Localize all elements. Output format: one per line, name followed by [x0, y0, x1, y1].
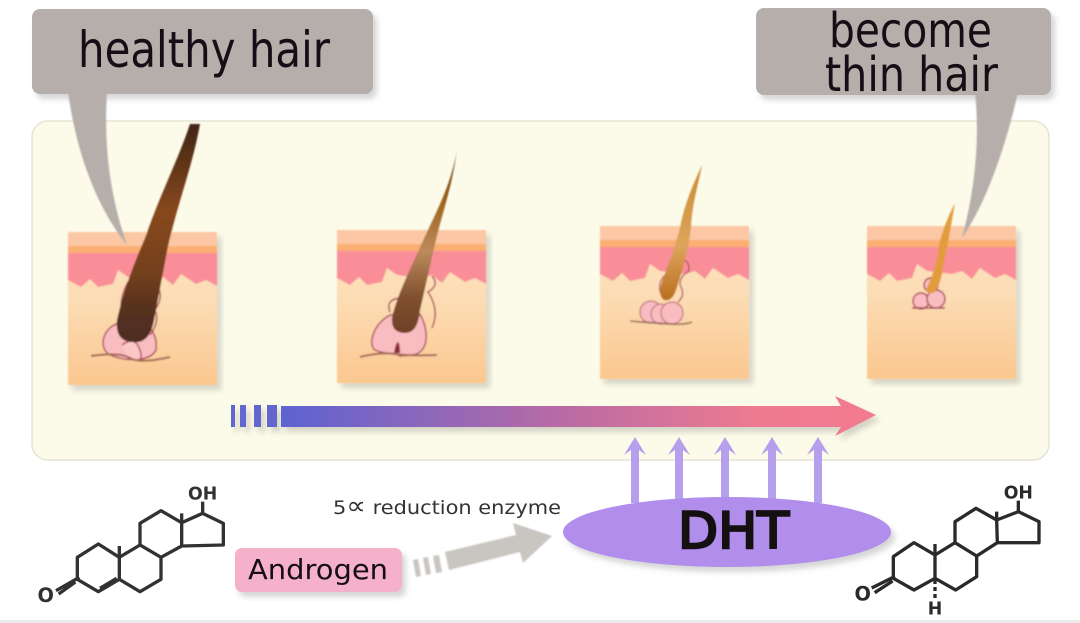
hair shaft [926, 203, 955, 293]
callout: healthy hair [32, 9, 373, 94]
papilla [103, 323, 156, 360]
DHT up arrows [624, 437, 829, 503]
sheath [121, 282, 160, 335]
stage 1: healthy follicle [68, 124, 217, 385]
progression arrow [231, 396, 876, 436]
label: become thin hair: thin hair [825, 47, 998, 103]
notch [394, 342, 400, 353]
hair shaft [660, 165, 702, 300]
label: healthy hair: healthy hair [78, 21, 330, 79]
hair shaft [392, 150, 457, 333]
base line [630, 321, 692, 324]
DHT ellipse [563, 497, 891, 567]
molecule: testosterone: O [37, 584, 54, 607]
androgen label: Androgen [248, 553, 388, 586]
papilla [640, 301, 683, 324]
label: become thin hair: become [829, 3, 992, 59]
base line [912, 307, 945, 309]
enzyme label: 5∝ reduction enzyme [333, 491, 561, 520]
molecule: DHT: O [854, 582, 871, 605]
panel: hair progression [32, 121, 1049, 460]
hair shaft [117, 124, 200, 342]
papilla [913, 278, 945, 309]
papilla [372, 312, 426, 356]
molecule: DHT: H [928, 600, 942, 620]
molecule: DHT [854, 483, 1039, 620]
callout: become thin hair [756, 3, 1051, 103]
DHT label: DHT [678, 502, 789, 560]
callout tail: become thin hair [962, 92, 1018, 238]
molecule: DHT: OH [1004, 483, 1033, 503]
stage 3: thin follicle [600, 165, 749, 379]
sheath [660, 258, 689, 302]
molecule: testosterone [37, 484, 223, 607]
base line [360, 353, 437, 357]
androgen label [235, 548, 402, 592]
gray conversion arrow [413, 523, 552, 577]
molecule: testosterone: OH [188, 484, 217, 504]
callout tail: healthy hair [68, 92, 127, 245]
stage 2: thinning follicle [337, 150, 486, 383]
base line [91, 354, 170, 361]
sheath [389, 276, 435, 328]
stage 4: very thin follicle [867, 203, 1016, 379]
